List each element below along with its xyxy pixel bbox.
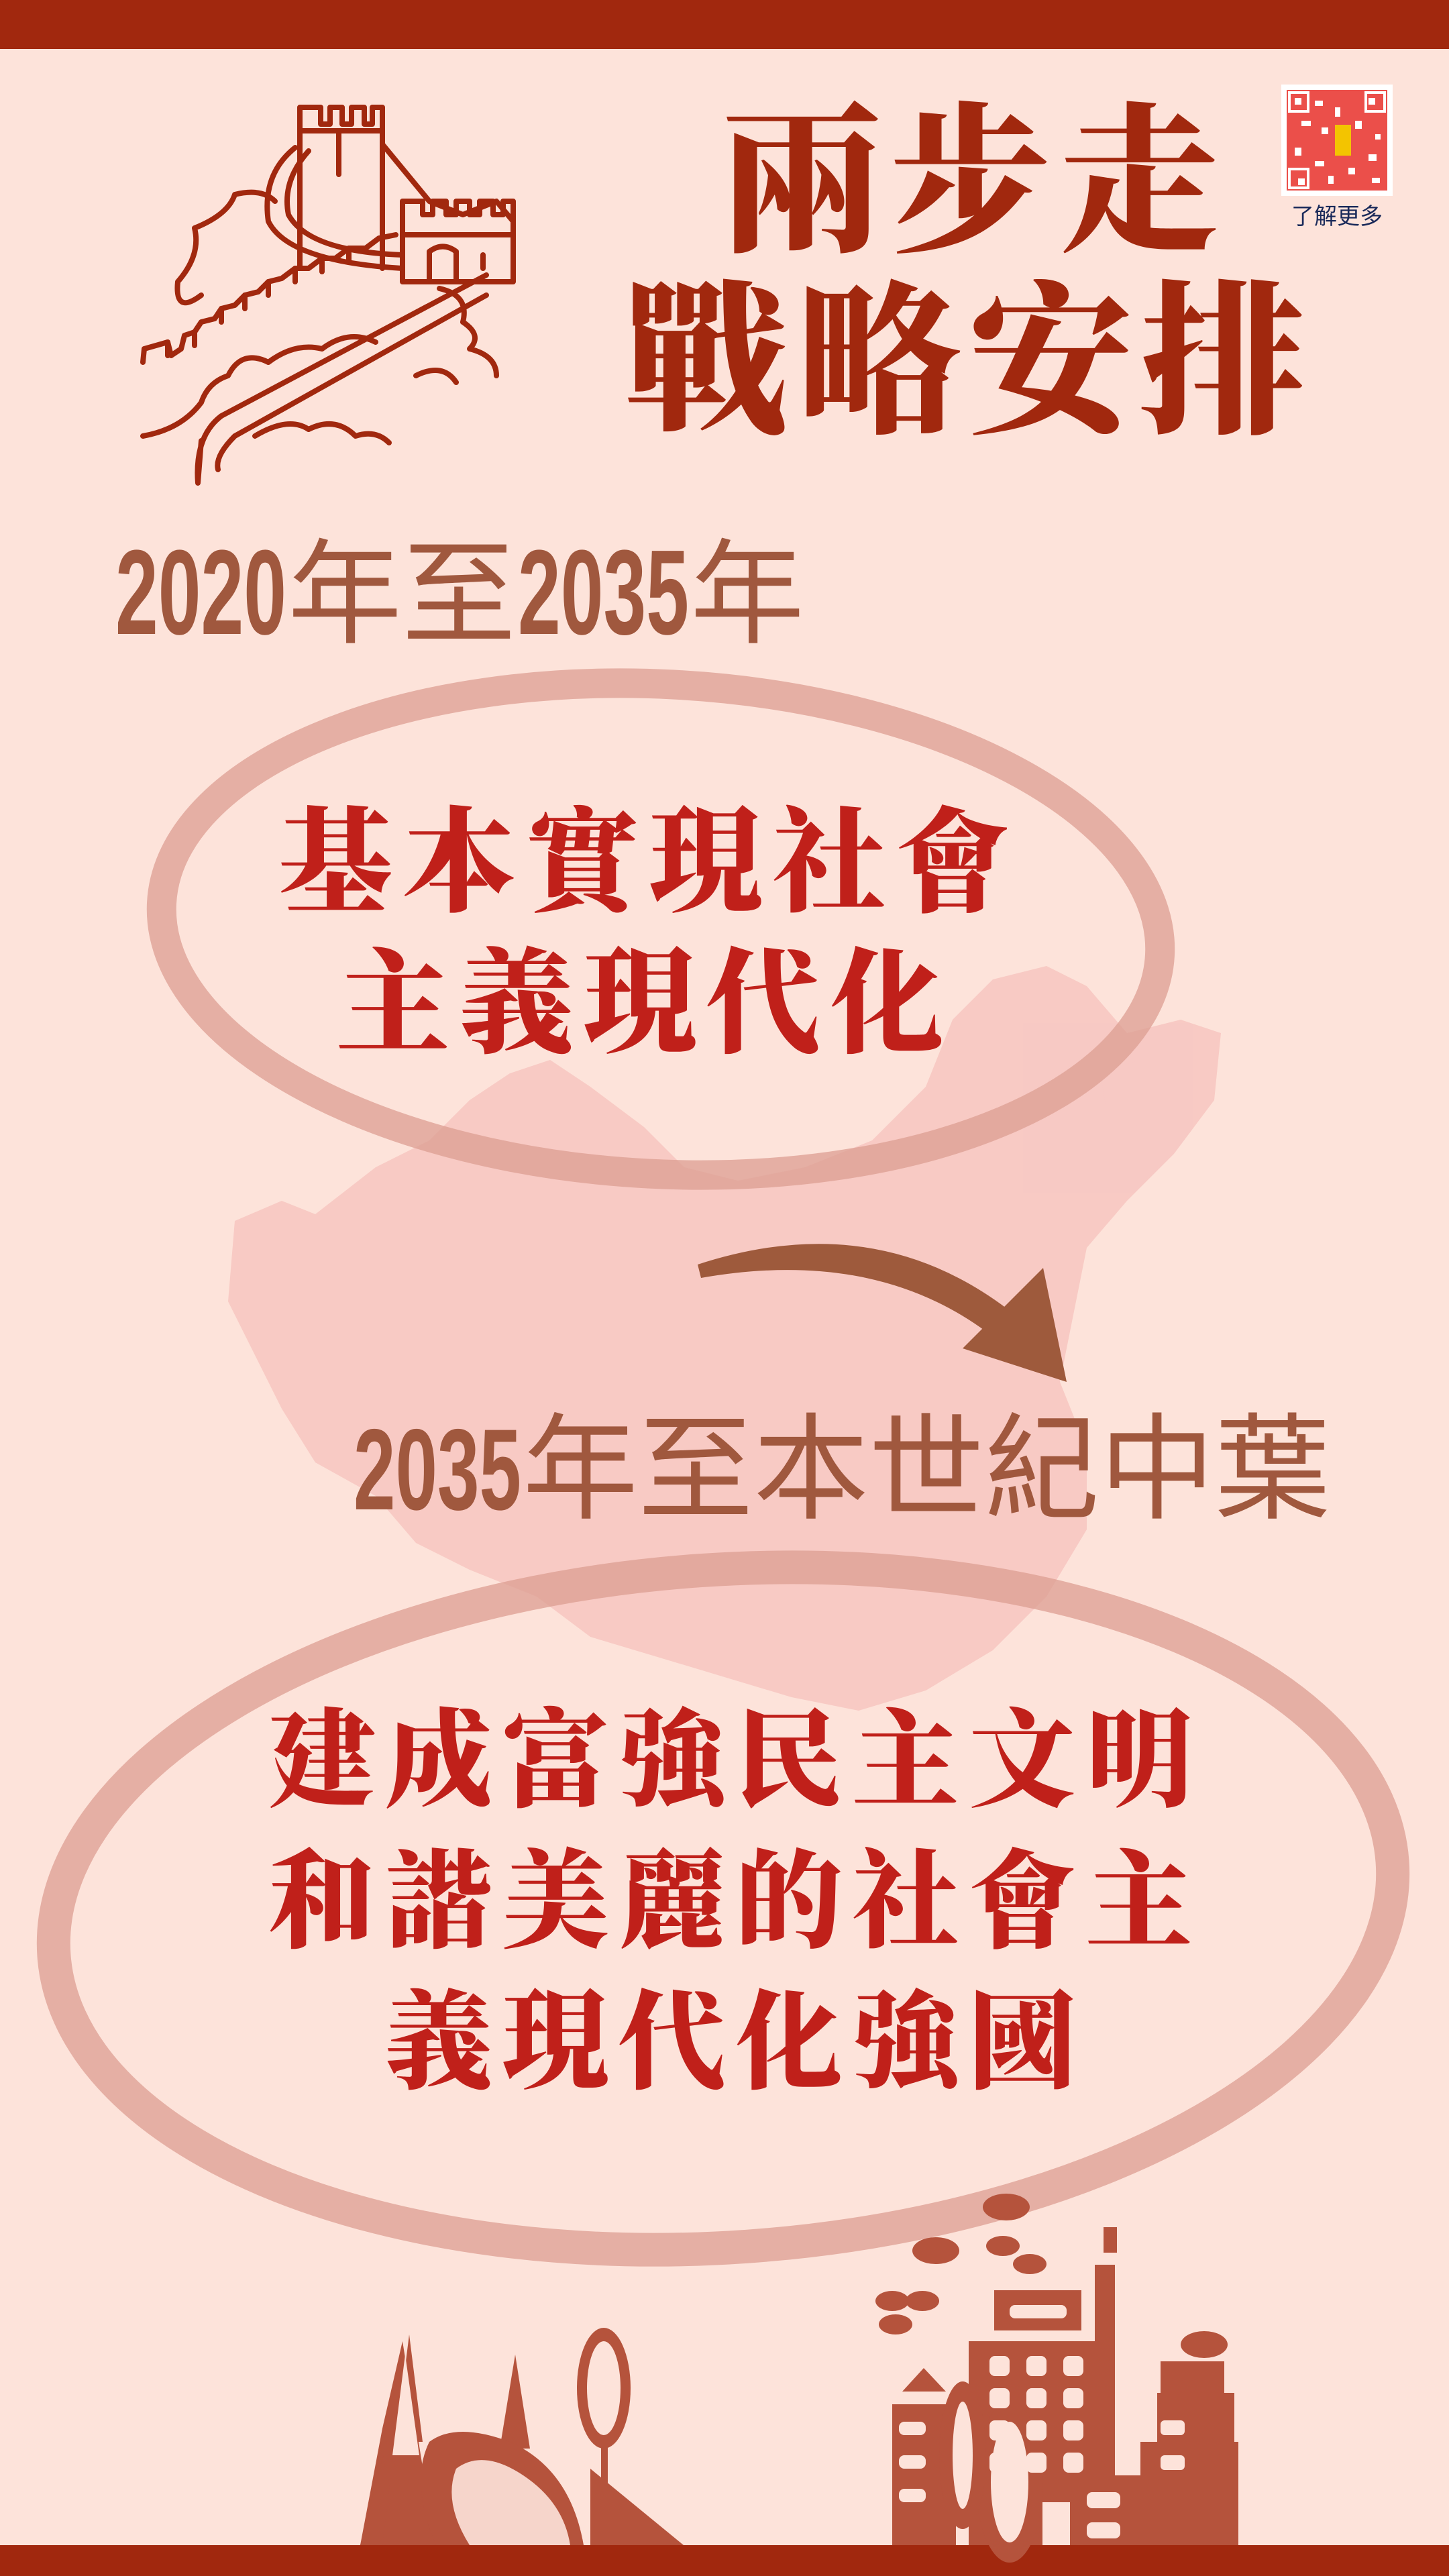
text: goal 1 [278, 771, 1019, 1076]
icon: trees and hill [360, 2328, 684, 2545]
text: goal 2: 義現代化強國 [385, 1956, 1085, 2110]
heading: 2020年至2035年: 年至 [288, 531, 516, 659]
heading: 2020年至2035年: 2020 [115, 525, 286, 660]
heading: 2020年至2035年: 年 [690, 531, 804, 659]
heading: 2020年至2035年 [115, 525, 804, 660]
city [875, 2194, 1238, 2563]
title [624, 53, 1313, 467]
heading: 2020年至2035年: 2035 [518, 525, 689, 660]
heading: 2035年至本世紀中葉: 2035 [354, 1405, 521, 1534]
title: 戰略安排 [624, 231, 1313, 467]
icon: great wall [143, 107, 513, 483]
map of China background [228, 966, 1221, 1711]
top bar [0, 0, 1449, 49]
QR caption: 了解更多 [1291, 204, 1383, 229]
ellipse 1 [149, 659, 1173, 1199]
QR code [1281, 85, 1393, 196]
title: 兩步走 [720, 53, 1228, 284]
text: goal 2 [268, 1674, 1202, 2110]
text: goal 2: 建成富強民主文明 [268, 1674, 1202, 1829]
arrow [698, 1244, 1067, 1382]
text: goal 2: 和諧美麗的社會主 [268, 1815, 1202, 1970]
heading: 2035年至本世紀中葉: 年至本世紀中葉 [523, 1405, 1330, 1534]
text: goal 1: 主義現代化 [336, 912, 953, 1076]
ellipse 2 [30, 1523, 1416, 2294]
bottom bar [0, 2545, 1449, 2576]
text: goal 1: 基本實現社會 [278, 771, 1019, 935]
